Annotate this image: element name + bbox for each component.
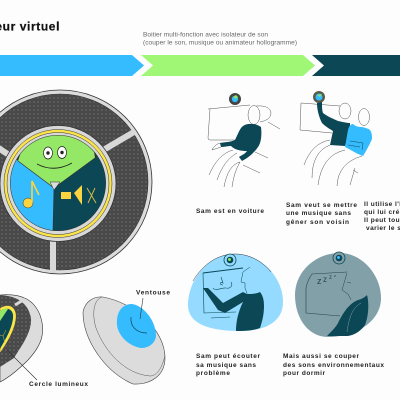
scene: Sam in car xyxy=(208,93,280,187)
device icon xyxy=(229,93,241,105)
textured ring xyxy=(0,94,148,270)
caption: Sam veut se mettre xyxy=(286,202,357,226)
snoring z's xyxy=(317,273,336,286)
device: front view xyxy=(0,90,152,274)
caption: Sam veut se mettre: une musique sans xyxy=(286,210,351,217)
icon: music note xyxy=(23,181,39,208)
caption: Sam veut se mettre: gêner son voisin xyxy=(286,219,349,226)
outer casing xyxy=(0,90,152,274)
device: back view with suction cup xyxy=(83,297,165,384)
sectors xyxy=(10,136,106,230)
arrow: blue stage xyxy=(0,55,144,76)
caption: Il utilise xyxy=(364,201,400,232)
snoring z's: z xyxy=(323,275,327,284)
device icon xyxy=(333,252,345,264)
device icon xyxy=(313,91,325,103)
caption: Sam est en voiture: Sam est en voiture xyxy=(196,208,264,215)
caption: Mais aussi xyxy=(283,353,384,377)
snoring z's: z xyxy=(334,273,336,278)
scene: Sam reaches device xyxy=(300,91,372,186)
caption: Mais aussi: pour dormir xyxy=(283,370,325,377)
spokes xyxy=(0,132,134,273)
arrow: dark stage xyxy=(312,55,400,76)
center indicator xyxy=(50,182,60,190)
caption: Mais aussi: des sons environnementaux xyxy=(283,362,384,369)
suction cup xyxy=(117,304,156,348)
caption: Mais aussi: Mais aussi se couper xyxy=(283,353,359,360)
icon: muted speaker xyxy=(61,185,96,205)
caption: Sam peut écouter: problème xyxy=(196,370,230,377)
caption: Sam peut écouter: Sam peut écouter xyxy=(196,353,260,360)
scene: Sam listens to music xyxy=(188,254,283,331)
caption: Sam peut écouter xyxy=(196,353,260,377)
arrow: green stage xyxy=(141,55,315,76)
description text: (couper le son, musique ou animateur hollogramme) xyxy=(143,40,297,46)
description text xyxy=(143,32,297,46)
label: Ventouse: Ventouse xyxy=(136,290,170,296)
icon: smiling face xyxy=(37,146,72,168)
snoring z's: z xyxy=(317,276,322,286)
snoring z's: z xyxy=(329,275,332,281)
caption: Sam peut écouter: sa musique sans xyxy=(196,362,256,369)
label: Cercle lumineux: Cercle lumineux xyxy=(29,381,88,388)
light ring xyxy=(0,126,116,242)
scene: Sam sleeps xyxy=(295,252,381,337)
description text: Boitier multi-fonction avec isolateur de son xyxy=(143,32,268,38)
device: side view with light xyxy=(0,295,43,382)
device icon xyxy=(224,254,236,266)
label: Cercle lumineux xyxy=(7,350,88,388)
caption: Sam veut se mettre: Sam veut se mettre xyxy=(286,202,357,209)
